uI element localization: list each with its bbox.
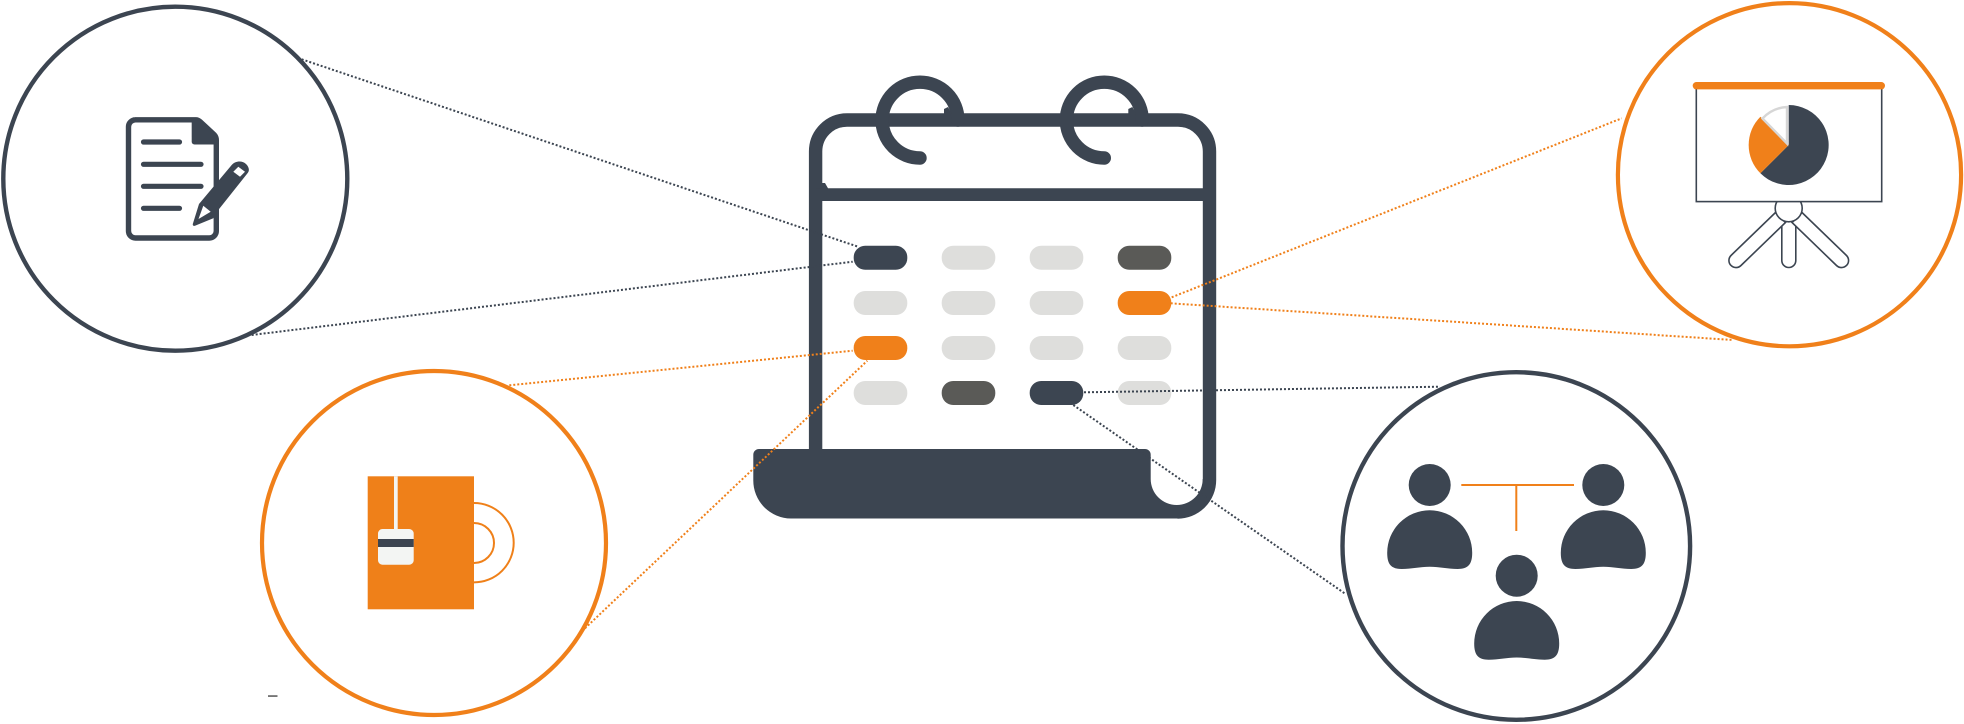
calendar date pills (854, 246, 1171, 405)
panel: team circle (1342, 372, 1690, 720)
icon: presentation board with pie chart (1693, 82, 1885, 268)
calendar frame (816, 120, 1210, 512)
easel legs (1729, 195, 1849, 268)
panel: mug circle (262, 371, 606, 715)
right binder ring (1066, 82, 1142, 158)
person left (1387, 464, 1472, 569)
left binder ring (882, 82, 958, 158)
panel: document circle (3, 7, 347, 351)
icon: three people connected (1387, 464, 1646, 660)
calendar curled footer (753, 449, 1216, 518)
person right (1561, 464, 1646, 569)
pie chart (1749, 105, 1829, 185)
icon: document with pencil (128, 118, 249, 238)
person bottom (1474, 555, 1559, 660)
dotted connector lines (252, 59, 1733, 628)
small stray mark (268, 695, 278, 697)
presentation screen (1696, 88, 1882, 202)
icon: mug with tea bag (368, 476, 514, 609)
calendar header bar (816, 183, 1209, 201)
orange connector (1461, 485, 1574, 531)
screen top bar (1693, 82, 1885, 89)
panel: presentation circle (1618, 3, 1961, 346)
central calendar (753, 82, 1216, 519)
